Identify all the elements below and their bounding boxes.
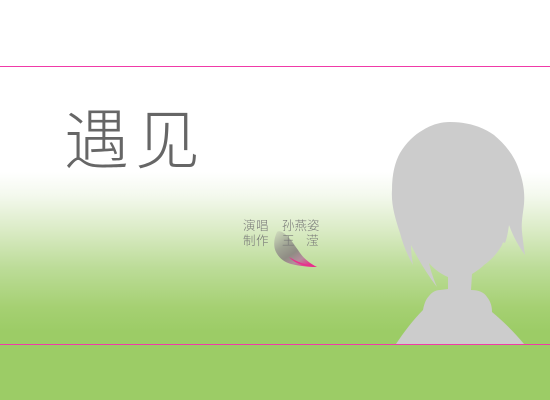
- top magenta rule: [0, 66, 550, 67]
- credits text: 孙燕姿: [282, 215, 320, 234]
- title: 遇见: [64, 88, 206, 182]
- credits text: 制作: [243, 230, 269, 249]
- credits text: 滢: [306, 230, 319, 249]
- credits text: [243, 215, 320, 249]
- bottom magenta rule: [0, 344, 550, 345]
- credits text: 王: [282, 230, 295, 249]
- credits text: 演唱: [243, 215, 269, 234]
